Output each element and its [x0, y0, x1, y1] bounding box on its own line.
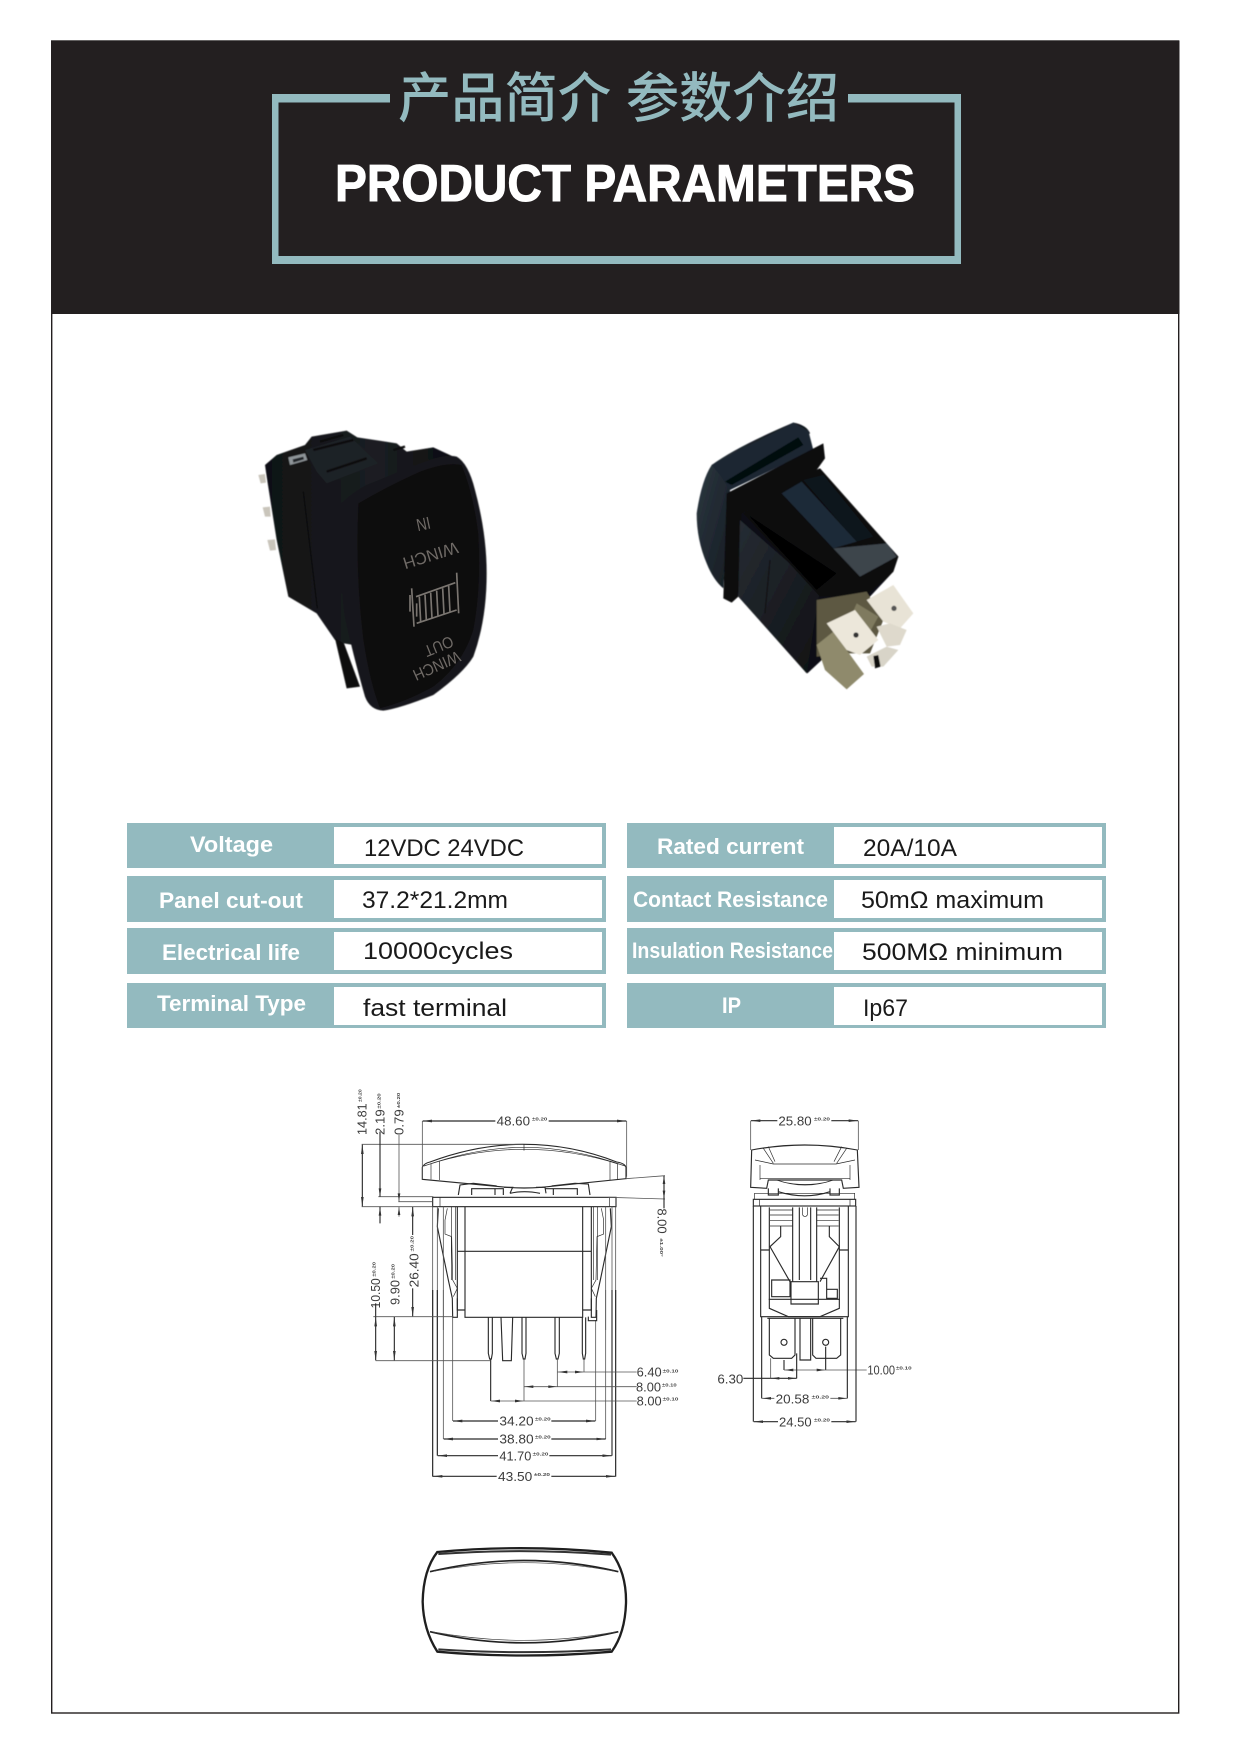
- row: rated current: Rated current: [657, 834, 805, 859]
- dimension: 48.60: ±0.20: [532, 1117, 548, 1122]
- snap clip right: [591, 1207, 611, 1317]
- dimension: 24.50: [753, 1206, 856, 1430]
- dimension: 14.81: [355, 1089, 523, 1207]
- dimension: 43.50: [433, 1469, 615, 1484]
- end view rocker: [751, 1145, 859, 1196]
- rocker outline: [422, 1144, 626, 1188]
- dimension: 6.40: [557, 1359, 679, 1387]
- terminals: [488, 1317, 586, 1361]
- dimension: rocker travel 8.00 degrees: ±1.00°: [659, 1238, 664, 1257]
- row: voltage: [127, 823, 606, 868]
- dimension: 8.00 upper: ±0.10: [662, 1383, 677, 1388]
- dimension: 26.40: 26.40: [406, 1253, 421, 1287]
- dimension: 43.50: 43.50: [498, 1469, 532, 1484]
- row: insulation resistance: Insulation Resistance: [632, 938, 833, 963]
- dimension: 25.80: [751, 1114, 858, 1150]
- dimension: 38.80: [444, 1432, 606, 1447]
- technical drawing: top view of rocker: [423, 1548, 626, 1655]
- dimension: 14.81: 14.81: [355, 1103, 370, 1135]
- technical drawing: side view: [355, 1089, 679, 1484]
- dimension: 8.00 upper: 8.00: [636, 1379, 661, 1394]
- dimension: rocker travel 8.00 degrees: [608, 1176, 669, 1257]
- dimension label: 10.50: ±0.20: [371, 1261, 376, 1277]
- switch body: [457, 1207, 591, 1317]
- dimension: 6.40: 6.40: [637, 1365, 662, 1380]
- dimension: 8.00 lower: [491, 1359, 679, 1408]
- dimension: 43.50: ±0.20: [534, 1472, 551, 1477]
- row: panel cut-out: 37.2*21.2mm: [362, 887, 508, 914]
- dimension: 10.00: ±0.10: [896, 1366, 912, 1371]
- row: electrical life: Electrical life: [162, 940, 300, 965]
- dimension: 25.80: ±0.20: [814, 1117, 831, 1122]
- row: terminal type: fast terminal: [363, 995, 507, 1022]
- dimension: 10.00: 10.00: [867, 1363, 895, 1378]
- dimension: 24.50: ±0.20: [814, 1418, 831, 1423]
- dimension: 34.20: 34.20: [499, 1414, 534, 1429]
- technical drawing: end view: [717, 1114, 912, 1430]
- row: ip rating: IP: [722, 993, 741, 1018]
- mounting base: [458, 1183, 590, 1195]
- dimension: 8.00 lower: ±0.10: [663, 1397, 679, 1402]
- title frame: [272, 94, 961, 264]
- switch legend: winch out: OUT: [421, 632, 456, 659]
- side view upper: rocker, flange and body: [355, 1089, 669, 1330]
- photo: switch front view: [258, 431, 487, 711]
- dimension: 2.19: 2.19: [372, 1109, 387, 1135]
- dimension: 38.80: 38.80: [499, 1432, 534, 1447]
- switch legend: winch in: IN: [414, 513, 432, 535]
- dimension: 20.58: [762, 1317, 847, 1406]
- dimension: 20.58: ±0.20: [812, 1394, 830, 1399]
- row: rated current: 20A/10A: [863, 835, 957, 862]
- dimension: 48.60: [422, 1114, 627, 1179]
- dimension: 48.60: 48.60: [497, 1114, 530, 1129]
- row: terminal type: Terminal Type: [157, 991, 306, 1016]
- side view lower: terminals and width dimensions: [373, 1290, 679, 1484]
- end view flange: [753, 1193, 856, 1206]
- chinese title: 产品简介 参数介绍: [398, 69, 839, 129]
- row: voltage: 12VDC 24VDC: [364, 835, 524, 862]
- dimension: 10.00: [784, 1347, 912, 1378]
- row: ip rating: Ip67: [863, 995, 908, 1022]
- parameter table: right column: [627, 823, 1106, 1028]
- dimension: 26.40: ±0.20: [409, 1235, 414, 1251]
- row: insulation resistance: [627, 928, 1106, 974]
- dimension label: 9.90: ±0.20: [391, 1263, 396, 1279]
- dimension: 8.00 upper: [524, 1359, 677, 1401]
- snap clip left: [437, 1207, 457, 1317]
- dimension: 10.50 and 9.90: [373, 1303, 490, 1361]
- dimension label: 9.90: [387, 1263, 402, 1305]
- dimension label: 9.90: 9.90: [387, 1280, 402, 1305]
- switch legend: winch out: WINCH: [410, 647, 463, 683]
- switch legend: winch out: [410, 632, 463, 683]
- housing verticals: [433, 1290, 616, 1477]
- end view body: [761, 1206, 848, 1317]
- switch legend: winch in: WINCH: [401, 538, 460, 573]
- dimension: 25.80: 25.80: [778, 1114, 812, 1129]
- dimension: 41.70: 41.70: [499, 1448, 531, 1463]
- dimension: 8.00 lower: 8.00: [637, 1393, 662, 1408]
- row: terminal type: [127, 983, 606, 1028]
- row: electrical life: 10000cycles: [363, 938, 513, 965]
- dimension: 0.79: [391, 1092, 433, 1217]
- row: ip rating: [627, 983, 1106, 1028]
- row: panel cut-out: Panel cut-out: [159, 888, 304, 913]
- photo: switch rear view: [697, 423, 913, 689]
- row: panel cut-out: [127, 876, 606, 922]
- dimension: 14.81: ±0.20: [358, 1089, 363, 1102]
- dimension: 6.30: [717, 1353, 797, 1386]
- icon: winch drum: [410, 573, 459, 627]
- dimension: 0.79: 0.79: [391, 1109, 406, 1135]
- dimension: 41.70: [438, 1448, 612, 1463]
- dimension: 26.40: [406, 1207, 421, 1316]
- dimension: 34.20: ±0.20: [535, 1417, 551, 1422]
- row: voltage: Voltage: [190, 832, 273, 857]
- row: contact resistance: 50mΩ maximum: [861, 887, 1044, 914]
- flange: [433, 1197, 616, 1207]
- row: contact resistance: Contact Resistance: [633, 887, 828, 912]
- dimension: 2.19: ±0.20: [377, 1093, 382, 1109]
- dimension label: 10.50: 10.50: [368, 1278, 383, 1308]
- row: rated current: [627, 823, 1106, 868]
- dimension: 6.30: 6.30: [717, 1371, 743, 1386]
- dimension: 20.58: 20.58: [776, 1391, 809, 1406]
- housing extension lines: [433, 1207, 616, 1330]
- dimension: 24.50: 24.50: [779, 1415, 812, 1430]
- dimension: 41.70: ±0.20: [533, 1451, 549, 1456]
- dimension: rocker travel 8.00 degrees: 8.00: [654, 1208, 669, 1234]
- header band: [52, 41, 1180, 314]
- dimension: 38.80: ±0.20: [535, 1434, 551, 1439]
- dimension: 2.19: [372, 1093, 433, 1223]
- row: electrical life: [127, 928, 606, 974]
- parameter table: left column: [127, 823, 606, 1028]
- dimension: 6.40: ±0.10: [663, 1368, 679, 1373]
- end view terminals: [767, 1318, 843, 1360]
- english title: PRODUCT PARAMETERS: [335, 155, 915, 213]
- dimension: 0.79: ±0.20: [396, 1092, 401, 1108]
- switch legend: winch in: [401, 513, 460, 573]
- dimension: 34.20: [453, 1414, 595, 1429]
- row: contact resistance: [627, 876, 1106, 922]
- row: insulation resistance: 500MΩ minimum: [862, 939, 1063, 966]
